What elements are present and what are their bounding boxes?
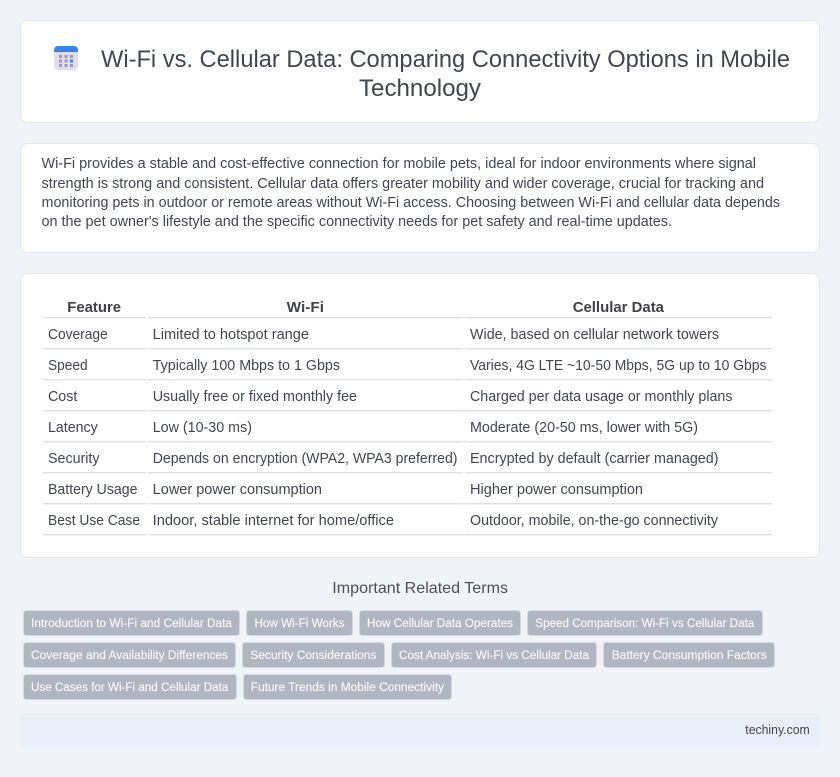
tag: Coverage and Availability Differences <box>31 648 228 662</box>
row: best use case: Outdoor, mobile, on-the-go connectivity <box>470 513 719 529</box>
title: Wi-Fi vs. Cellular Data: Comparing Connectivity Options in Mobile <box>101 46 790 73</box>
row: best use case: Best Use Case <box>48 513 140 529</box>
text block: intro paragraph: on the pet owner's lifestyle and the specific connectivity needs for pet safety and real-time updates. <box>42 214 672 230</box>
tag: How Cellular Data Operates <box>367 616 513 630</box>
text block: intro paragraph: Wi-Fi provides a stable and cost-effective connection for mobile pets, ideal for indoor environments where signal <box>42 156 756 172</box>
text block: intro paragraph: strength is strong and consistent. Cellular data offers greater mobility and wider coverage, crucial for tracking and <box>42 176 764 192</box>
table header <box>67 299 665 316</box>
tag <box>242 642 384 668</box>
tag <box>24 642 236 668</box>
row: battery usage <box>48 482 643 498</box>
tag: Introduction to Wi-Fi and Cellular Data <box>31 616 232 630</box>
tag <box>528 610 762 636</box>
icon: calendar <box>54 46 78 70</box>
tag <box>360 610 520 636</box>
tag: Cost Analysis: Wi-Fi vs Cellular Data <box>399 648 589 662</box>
row: cost: Charged per data usage or monthly plans <box>470 389 732 405</box>
row: coverage: Coverage <box>48 327 108 343</box>
footer: techiny.com <box>745 722 810 737</box>
title <box>101 46 790 102</box>
panel: title card <box>20 20 820 122</box>
title: Technology <box>359 75 482 102</box>
table header: Cellular Data <box>573 299 665 316</box>
row: security: Encrypted by default (carrier managed) <box>470 451 718 467</box>
tag: Use Cases for Wi-Fi and Cellular Data <box>31 680 228 694</box>
row: best use case: Indoor, stable internet for home/office <box>153 513 394 529</box>
row: coverage: Limited to hotspot range <box>153 327 309 343</box>
row: coverage: Wide, based on cellular network towers <box>470 327 719 343</box>
row: security <box>48 451 718 467</box>
tag: Battery Consumption Factors <box>612 648 767 662</box>
tag <box>24 674 236 700</box>
text block: intro paragraph: monitoring pets in outdoor or remote areas without Wi-Fi access. Choosing between Wi-Fi and cellular data depends <box>42 195 780 211</box>
tag <box>604 642 774 668</box>
tag: Future Trends in Mobile Connectivity <box>251 680 445 694</box>
tag <box>392 642 596 668</box>
row: cost <box>48 389 732 405</box>
row: security: Depends on encryption (WPA2, WPA3 preferred) <box>153 451 457 467</box>
row: speed: Varies, 4G LTE ~10-50 Mbps, 5G up to 10 Gbps <box>470 358 766 374</box>
heading: important related terms: Important Related Terms <box>332 580 508 597</box>
row: cost: Usually free or fixed monthly fee <box>153 389 357 405</box>
tag <box>244 674 452 700</box>
row: latency <box>48 420 698 436</box>
row: best use case <box>48 513 719 529</box>
row: battery usage: Lower power consumption <box>153 482 322 498</box>
table header: Wi-Fi <box>287 299 324 316</box>
panel: introduction <box>20 144 820 252</box>
panel: comparison table <box>20 274 820 558</box>
row: speed: Typically 100 Mbps to 1 Gbps <box>153 358 340 374</box>
row: latency: Latency <box>48 420 98 436</box>
tag <box>246 610 352 636</box>
related term tags <box>24 610 774 700</box>
row: speed: Speed <box>48 358 88 374</box>
tag: Security Considerations <box>250 648 376 662</box>
tag: Speed Comparison: Wi-Fi vs Cellular Data <box>535 616 754 630</box>
footer <box>20 713 820 747</box>
text block: intro paragraph <box>42 156 780 230</box>
tag: How Wi-Fi Works <box>254 616 344 630</box>
row: battery usage: Higher power consumption <box>470 482 643 498</box>
row: latency: Moderate (20-50 ms, lower with 5G) <box>470 420 698 436</box>
row: security: Security <box>48 451 100 467</box>
tag <box>24 610 240 636</box>
row: speed <box>48 358 766 374</box>
row: battery usage: Battery Usage <box>48 482 138 498</box>
row: cost: Cost <box>48 389 77 405</box>
table header: Feature <box>67 299 121 316</box>
row: latency: Low (10-30 ms) <box>153 420 252 436</box>
row: coverage <box>48 327 719 343</box>
